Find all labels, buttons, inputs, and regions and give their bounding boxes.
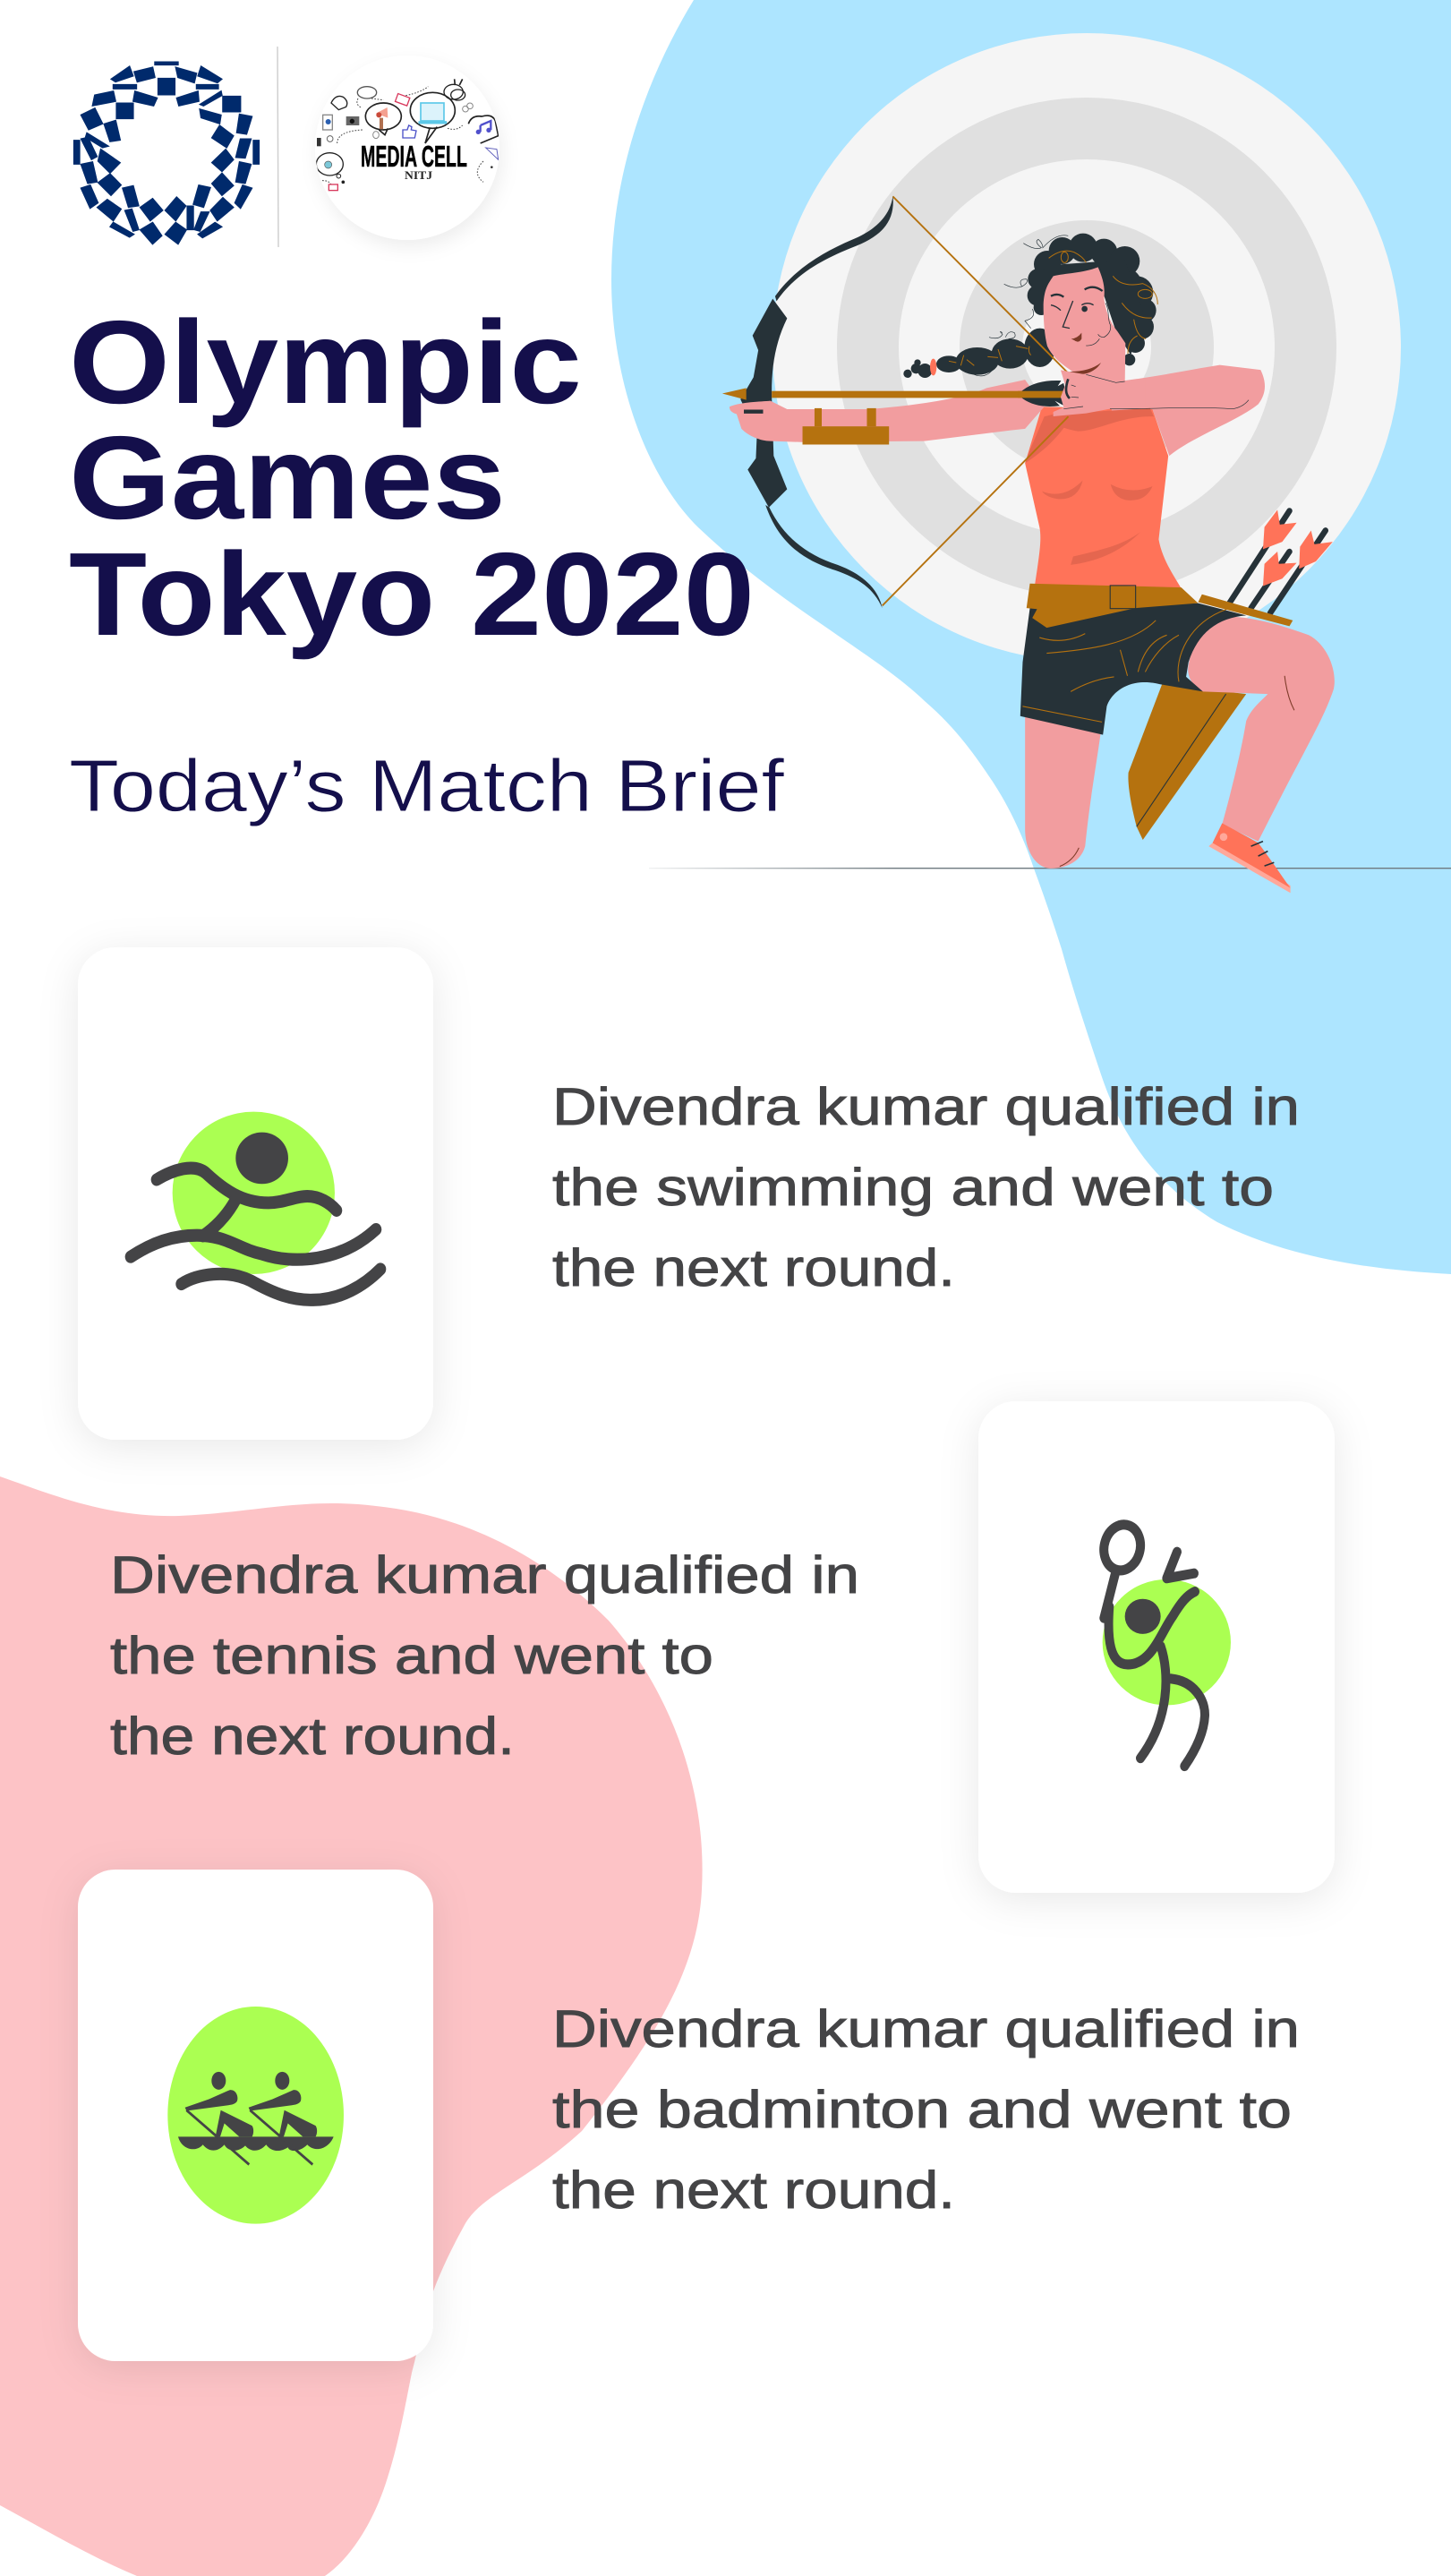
bracer — [803, 408, 889, 444]
background blob: blue — [611, 0, 1451, 1274]
quiver and arrows — [1198, 509, 1333, 626]
logo: Tokyo 2020 checkered ring — [74, 62, 259, 244]
kneeling leg — [1025, 711, 1101, 869]
logo: Media Cell NITJ circle — [315, 56, 499, 240]
ground line — [649, 868, 1451, 869]
text: tennis: Divendra kumar qualified in — [110, 1546, 859, 1605]
text: badminton: Divendra kumar qualified in — [552, 2000, 1300, 2058]
bow arm — [730, 380, 1045, 442]
logo: Media Cell NITJ circle: NITJ — [405, 168, 433, 182]
text: tennis — [110, 1546, 859, 1766]
scabbard — [1128, 684, 1246, 840]
logo: Media Cell NITJ circle: MEDIA CELL — [361, 140, 467, 173]
background blob: pink — [0, 1476, 703, 2576]
drawing hand — [1054, 370, 1249, 416]
chest shadow — [1045, 408, 1154, 432]
torso — [1025, 407, 1182, 588]
subtitle: Today’s Match Brief — [69, 744, 785, 827]
icon: rowers — [167, 2007, 344, 2224]
card: rowing — [78, 1870, 433, 2361]
title: Olympic — [69, 296, 582, 428]
icon: swimmer — [131, 1112, 380, 1300]
title: Tokyo 2020 — [69, 528, 755, 660]
text: badminton — [552, 2000, 1300, 2220]
text: swimming: the next round. — [552, 1239, 955, 1297]
title: Games — [69, 412, 506, 543]
illustration: archer — [722, 195, 1335, 893]
bow — [740, 195, 893, 608]
card: badminton player — [978, 1401, 1335, 1893]
bowstring — [883, 196, 1068, 605]
raised leg — [1188, 617, 1335, 842]
arrow — [722, 381, 1066, 412]
text: swimming: Divendra kumar qualified in — [552, 1078, 1300, 1136]
text: tennis: the next round. — [110, 1707, 515, 1766]
text: swimming — [552, 1078, 1300, 1297]
icon: racket player — [1098, 1519, 1231, 1767]
head with hair and braid — [903, 234, 1157, 385]
title — [69, 296, 755, 660]
text: badminton: the badminton and went to — [552, 2081, 1292, 2139]
face — [1044, 267, 1125, 385]
target rings — [772, 33, 1401, 662]
shorts — [1020, 603, 1246, 735]
drawing arm — [1112, 365, 1265, 456]
text: swimming: the swimming and went to — [552, 1159, 1274, 1217]
card: swimming — [78, 947, 433, 1440]
torso shading — [1025, 416, 1152, 565]
text: badminton: the next round. — [552, 2161, 955, 2220]
belt — [1027, 584, 1198, 628]
shoe — [1208, 823, 1291, 893]
text: tennis: the tennis and went to — [110, 1627, 713, 1685]
